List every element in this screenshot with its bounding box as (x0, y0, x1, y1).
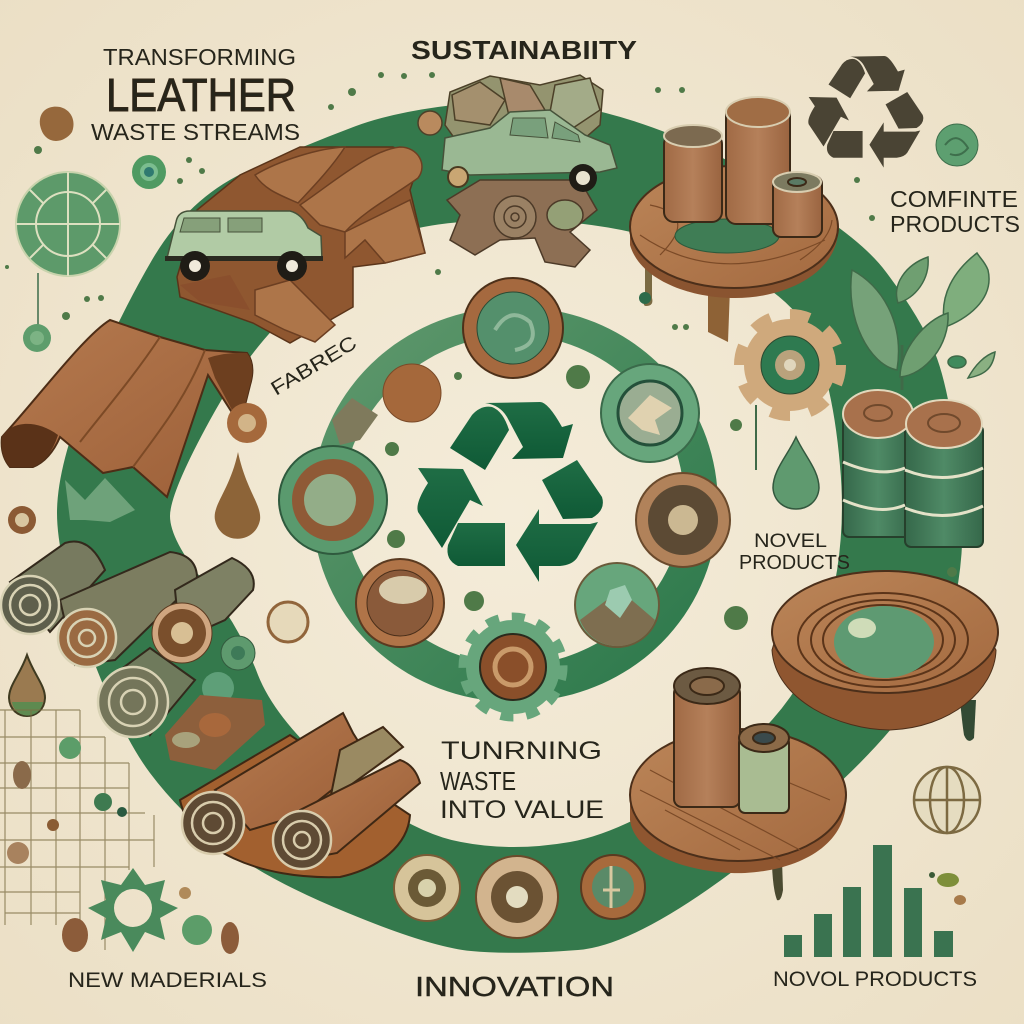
label: composite products: PRODUCTS (890, 211, 1020, 237)
icon: recycling symbol top right (808, 56, 923, 168)
inner cycle discs (279, 278, 730, 717)
small icons left column (8, 403, 267, 716)
leather rolls left (1, 542, 254, 737)
title: LEATHER (106, 69, 296, 121)
icon: green car top centre (442, 110, 617, 192)
large wood table with green dome (772, 571, 998, 741)
label: turning waste into value: TUNRNING (441, 737, 602, 765)
icon: green gear bottom left (88, 868, 178, 952)
scrap cluster lower left (165, 602, 308, 770)
brown bits bottom left (62, 887, 239, 954)
label: new materials: NEW MADERIALS (68, 969, 267, 992)
wood table with cans, top right (630, 166, 838, 342)
title: TRANSFORMING (103, 44, 296, 70)
icon: central recycling symbol (417, 402, 603, 582)
grid dots (7, 737, 127, 864)
label: novel products centre: NOVEL (754, 531, 827, 552)
grid lower left (0, 710, 154, 950)
label: novol products: NOVOL PRODUCTS (773, 968, 977, 991)
label: turning waste into value: INTO VALUE (440, 796, 604, 824)
icon: green coin top right (936, 124, 978, 166)
big rolled leather bottom (180, 713, 420, 877)
icon: green leaf drop (773, 437, 819, 509)
speckles (5, 72, 957, 630)
scrap heap top centre (418, 75, 603, 267)
icon: small leaf cluster lower right (929, 872, 966, 905)
label: composite products: COMFINTE (890, 186, 1018, 212)
title (91, 44, 300, 145)
faded scrap on inner ring (332, 398, 378, 445)
label: novel products centre (739, 531, 850, 574)
green barrels (843, 390, 983, 547)
label: turning waste into value: WASTE (440, 766, 516, 796)
cans bottom (674, 668, 789, 813)
cans top right (664, 97, 822, 237)
leather sheet left (2, 320, 252, 497)
icon: tan gear over rolls (152, 603, 212, 663)
bar chart (784, 845, 953, 957)
title: WASTE STREAMS (91, 119, 300, 145)
globe outline lower right (914, 767, 980, 833)
small wood table with cans bottom (630, 729, 846, 900)
inner green cycle ring (312, 307, 718, 702)
label: composite products (890, 186, 1020, 237)
outer green cycle ring (57, 100, 963, 953)
icon: leaves (851, 253, 995, 390)
icon: green van left (165, 211, 323, 281)
icon: tan gear right (740, 315, 840, 470)
label: innovation: INNOVATION (415, 971, 614, 1002)
icon: globe top left (16, 172, 120, 352)
label: novel products centre: PRODUCTS (739, 552, 850, 574)
label: turning waste into value (440, 737, 604, 824)
bottom coins on ring (394, 855, 645, 938)
leather scraps with car, top left (177, 147, 425, 343)
icon: green target (132, 155, 166, 189)
label: fabric: FABREC (267, 332, 361, 400)
icon: brown blob top left (40, 107, 74, 141)
heading: sustainability: SUSTAINABIITY (411, 35, 637, 65)
